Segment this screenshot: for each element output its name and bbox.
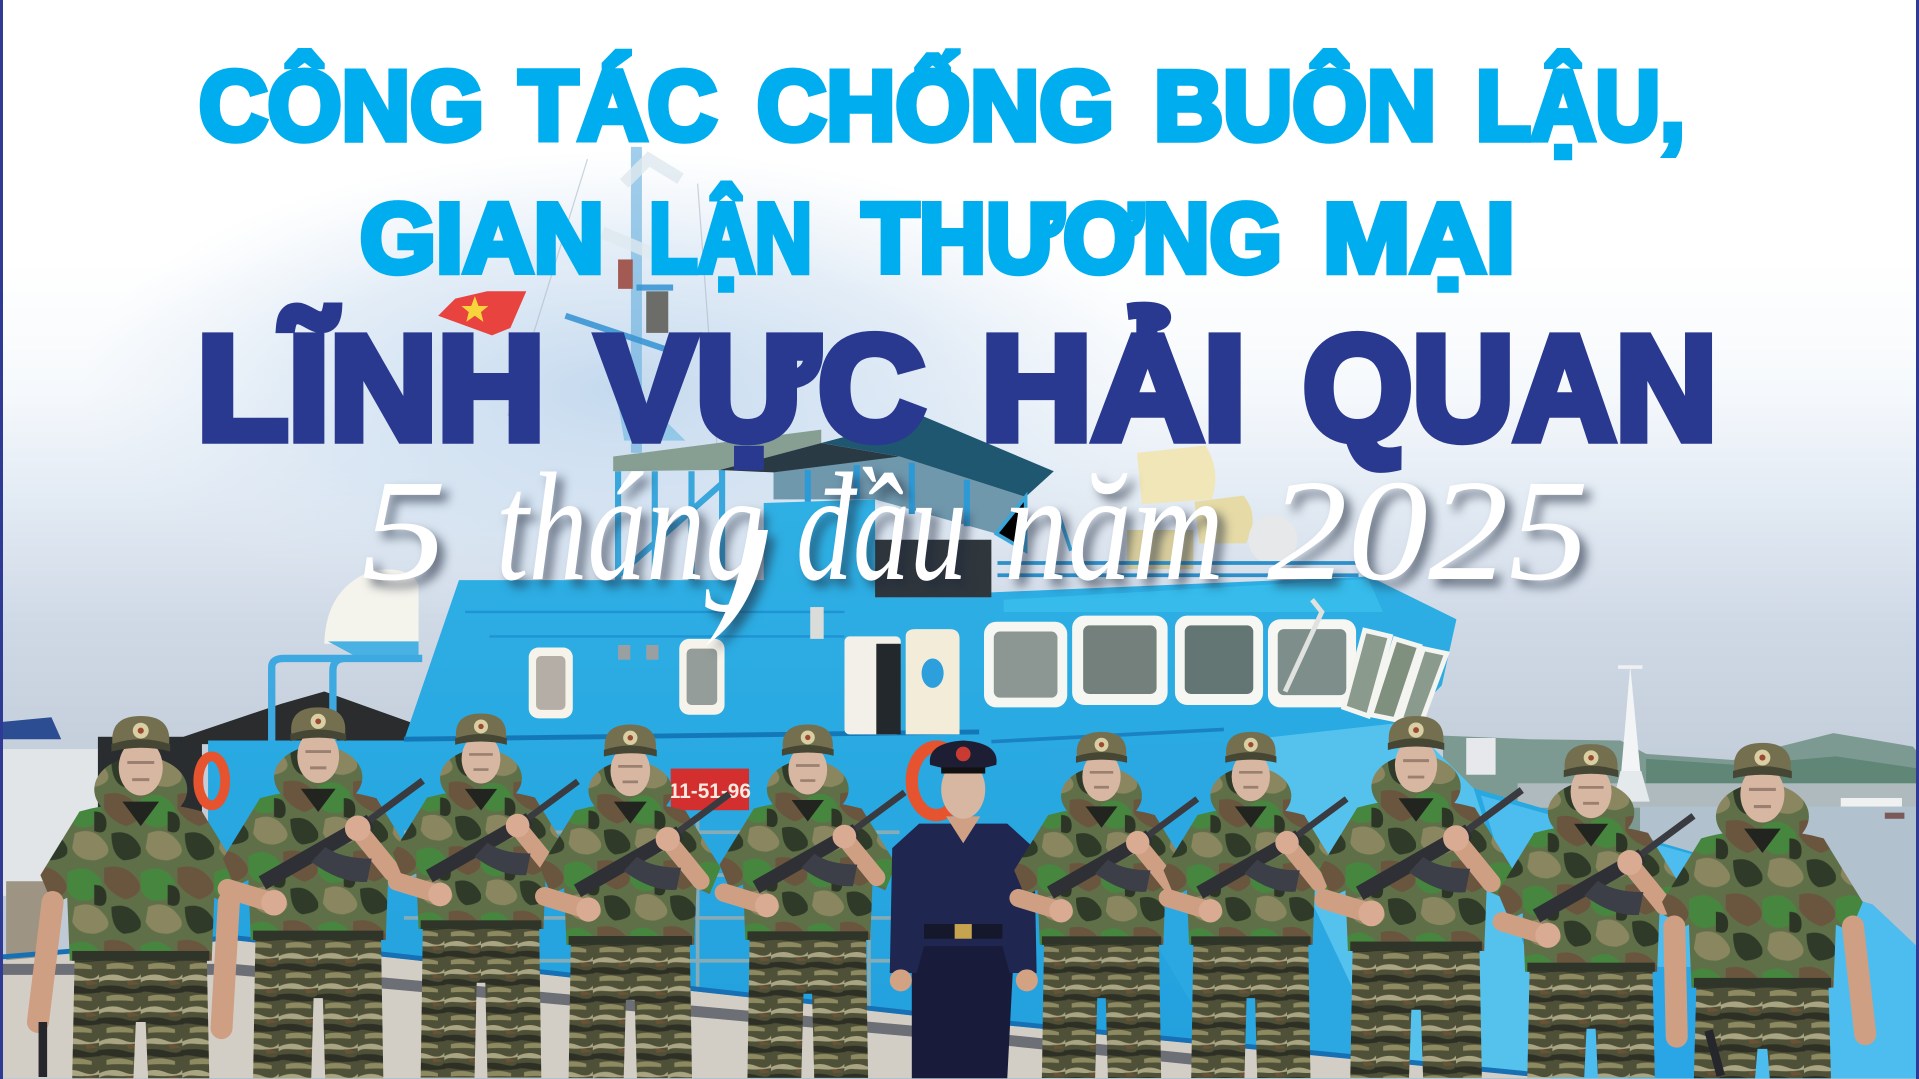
title line 1: LẬU, bbox=[1476, 50, 1685, 160]
subtitle: năm bbox=[1004, 441, 1224, 613]
subtitle: tháng bbox=[496, 441, 764, 613]
title line 1: BUÔN bbox=[1154, 50, 1436, 160]
bridge windows bbox=[984, 600, 1447, 720]
cabin doors bbox=[844, 629, 960, 734]
subtitle: 2025 bbox=[1267, 451, 1589, 611]
title line 1: CHỐNG bbox=[757, 50, 1114, 160]
vietnamese flag bbox=[438, 291, 526, 335]
soldier 4 bbox=[540, 725, 729, 1078]
title line 3: VỰC bbox=[597, 306, 925, 471]
portholes bbox=[529, 607, 824, 718]
rear rail frame bbox=[272, 658, 422, 740]
soldier 2 bbox=[223, 707, 423, 1078]
subtitle: 5 bbox=[361, 451, 447, 611]
left border bbox=[0, 0, 3, 1079]
title line 2: GIAN bbox=[360, 183, 604, 293]
soldier 7 bbox=[1014, 732, 1197, 1078]
title line 3 bbox=[197, 306, 1717, 471]
spotlights bbox=[1127, 445, 1297, 569]
radome bbox=[324, 569, 419, 656]
title line 3: HẢI bbox=[981, 306, 1246, 471]
title line 2 bbox=[360, 183, 1515, 293]
ship superstructure bbox=[208, 499, 1919, 1078]
subtitle: đầu bbox=[796, 441, 967, 613]
soft blue haze behind the mast bbox=[80, 150, 1160, 630]
soldier 8 bbox=[1164, 732, 1347, 1078]
customs officer bbox=[890, 740, 1038, 1078]
right border bbox=[1916, 0, 1919, 1079]
title line 1 bbox=[199, 50, 1685, 160]
quay floor bbox=[0, 938, 1552, 1078]
soldier 3 bbox=[393, 714, 578, 1078]
soldier 11 bbox=[1662, 743, 1865, 1078]
canopy and upper deck bbox=[613, 416, 1071, 581]
title line 2: THƯƠNG bbox=[862, 183, 1282, 293]
soldier 9 bbox=[1320, 716, 1522, 1078]
lifebuoys bbox=[198, 747, 961, 815]
title block bbox=[197, 50, 1717, 646]
title line 2: MẠI bbox=[1323, 183, 1515, 293]
ship number plate: 11-51-96 bbox=[669, 780, 751, 803]
title line 2: LẬN bbox=[649, 183, 812, 293]
title line 3: LĨNH bbox=[197, 306, 545, 471]
title line 1: CÔNG bbox=[199, 50, 484, 160]
deck railing bbox=[404, 814, 900, 1016]
subtitle bbox=[361, 441, 1589, 646]
ship number plate bbox=[669, 769, 751, 810]
soldier 1 bbox=[38, 716, 241, 1078]
background hills and city bbox=[1443, 666, 1919, 1039]
title line 3: QUAN bbox=[1303, 306, 1717, 471]
mast bbox=[508, 147, 722, 514]
soldier 5 bbox=[719, 725, 905, 1078]
left quay objects bbox=[0, 692, 410, 961]
soldier 10 bbox=[1498, 744, 1694, 1078]
title line 1: TÁC bbox=[519, 50, 717, 160]
